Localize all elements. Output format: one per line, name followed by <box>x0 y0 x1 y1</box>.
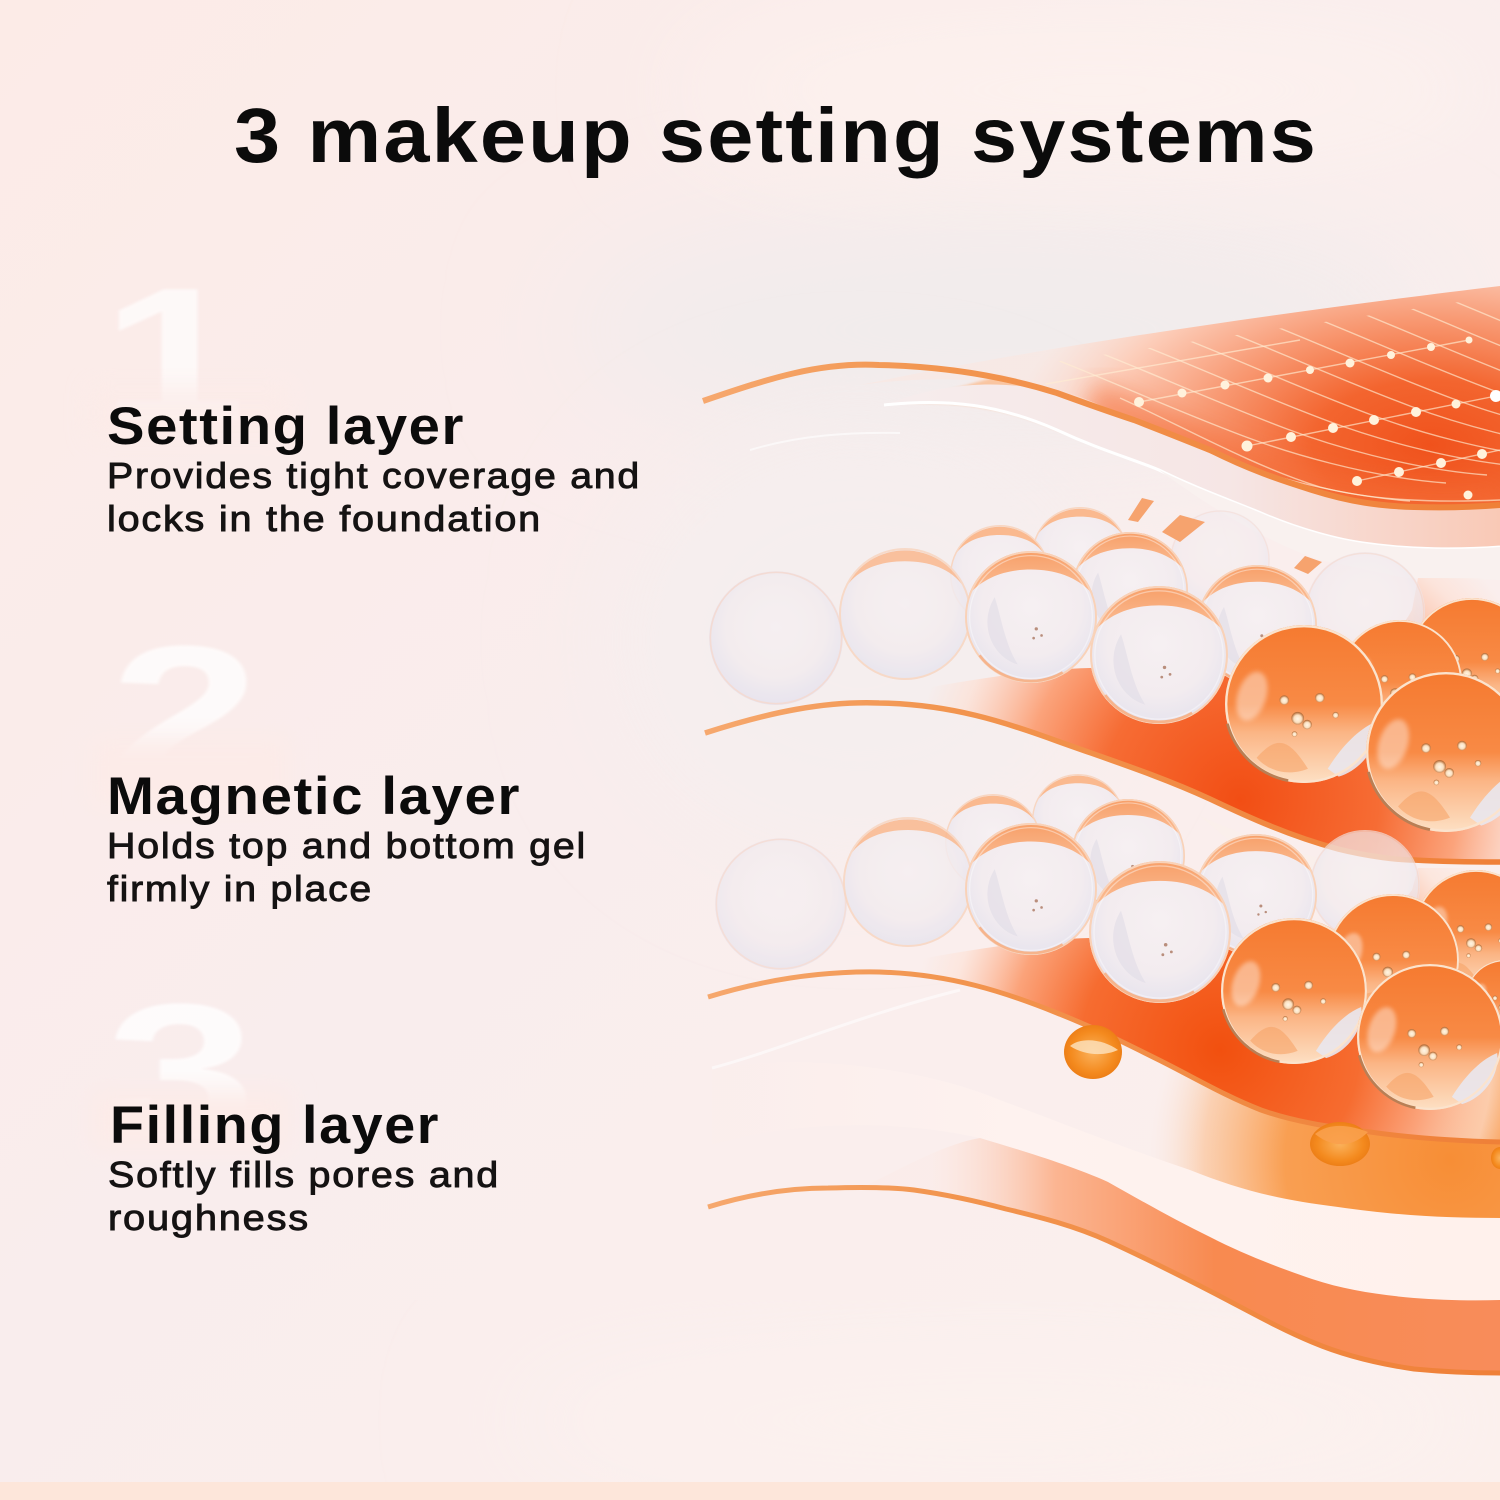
big pale numeral 1: 1 <box>101 249 246 461</box>
middle sheet: magnetic layer <box>705 578 1500 862</box>
clear sphere c <box>965 823 1097 955</box>
numeral fade overlay 2 <box>90 738 290 808</box>
layer illustration <box>703 282 1500 1373</box>
lower orange sheet <box>860 1138 1500 1373</box>
orange glow blob <box>1000 1020 1500 1240</box>
clear sphere b <box>839 548 971 680</box>
lower sheet: filling layer top part <box>708 868 1500 1142</box>
edge line <box>705 703 1500 862</box>
lower orange edge line <box>708 1187 1500 1373</box>
peach underside wedge <box>905 376 1312 490</box>
title: 3 makeup setting systems <box>234 93 1318 179</box>
droplets <box>1064 1025 1500 1169</box>
text block: setting layer <box>107 397 641 539</box>
description: filling layer line 2: roughness <box>108 1197 310 1238</box>
orange edge line <box>703 365 1500 507</box>
big pale numeral 2: 2 <box>110 607 260 819</box>
back row spheres <box>950 498 1425 685</box>
description: magnetic layer line 1: Holds top and bottom gel <box>107 825 587 866</box>
clear and orange spheres row 2 <box>715 774 1500 1110</box>
text block: magnetic layer <box>107 767 587 909</box>
orange sphere front right <box>1366 672 1500 832</box>
clear sphere c <box>965 551 1097 683</box>
numeral fade overlay 1 <box>90 385 290 440</box>
white band lower body <box>1159 470 1500 580</box>
clear sphere d <box>1089 861 1231 1003</box>
droplet 3 <box>1491 1147 1500 1169</box>
faint gloss strokes <box>750 433 900 450</box>
faded clear sphere <box>709 571 843 705</box>
band white edge <box>884 402 1500 549</box>
grid lines <box>1000 282 1500 501</box>
orange shading along edge <box>1076 372 1292 480</box>
orange sphere clipped right <box>1465 960 1500 1040</box>
clear sphere b <box>843 817 973 947</box>
gloss stroke left <box>712 990 960 1068</box>
numeral fade overlay 3 <box>90 1090 290 1150</box>
orange sphere front right <box>1357 964 1500 1110</box>
clear sphere d <box>1090 586 1228 724</box>
description: setting layer line 2: locks in the foundation <box>107 498 542 539</box>
orange sphere front left <box>1225 625 1383 783</box>
description: setting layer line 1: Provides tight coverage and <box>107 455 641 496</box>
heading: filling layer: Filling layer <box>110 1096 440 1155</box>
white band under middle sheet <box>1200 816 1500 900</box>
top sheet: setting layer with grid <box>702 286 1500 549</box>
description: filling layer line 1: Softly fills pores and <box>108 1154 500 1195</box>
back row spheres <box>945 774 1420 956</box>
orange sphere back right <box>1414 870 1500 994</box>
sheet surface <box>860 286 1500 507</box>
big pale numeral 3: 3 <box>106 965 256 1177</box>
sheet surface <box>820 578 1500 862</box>
heading: magnetic layer: Magnetic layer <box>107 767 521 826</box>
grid dots <box>1134 336 1500 500</box>
orange sphere back <box>1338 620 1462 744</box>
orange sphere back right <box>1408 598 1500 726</box>
orange sphere back <box>1327 894 1459 1026</box>
faded clear sphere <box>715 838 847 970</box>
edge line <box>708 972 1500 1142</box>
clear and orange spheres row 1 <box>709 498 1500 832</box>
text block: filling layer <box>108 1096 500 1238</box>
orange sphere front left <box>1221 918 1367 1064</box>
bottom layers <box>708 990 1500 1373</box>
droplet 1 <box>1064 1025 1122 1079</box>
white wave band <box>712 1062 1500 1300</box>
heading: setting layer: Setting layer <box>107 397 465 456</box>
white band below sheet <box>884 384 1500 549</box>
droplet 2 <box>1310 1122 1370 1166</box>
sheet surface <box>820 868 1500 1142</box>
description: magnetic layer line 2: firmly in place <box>107 868 373 909</box>
